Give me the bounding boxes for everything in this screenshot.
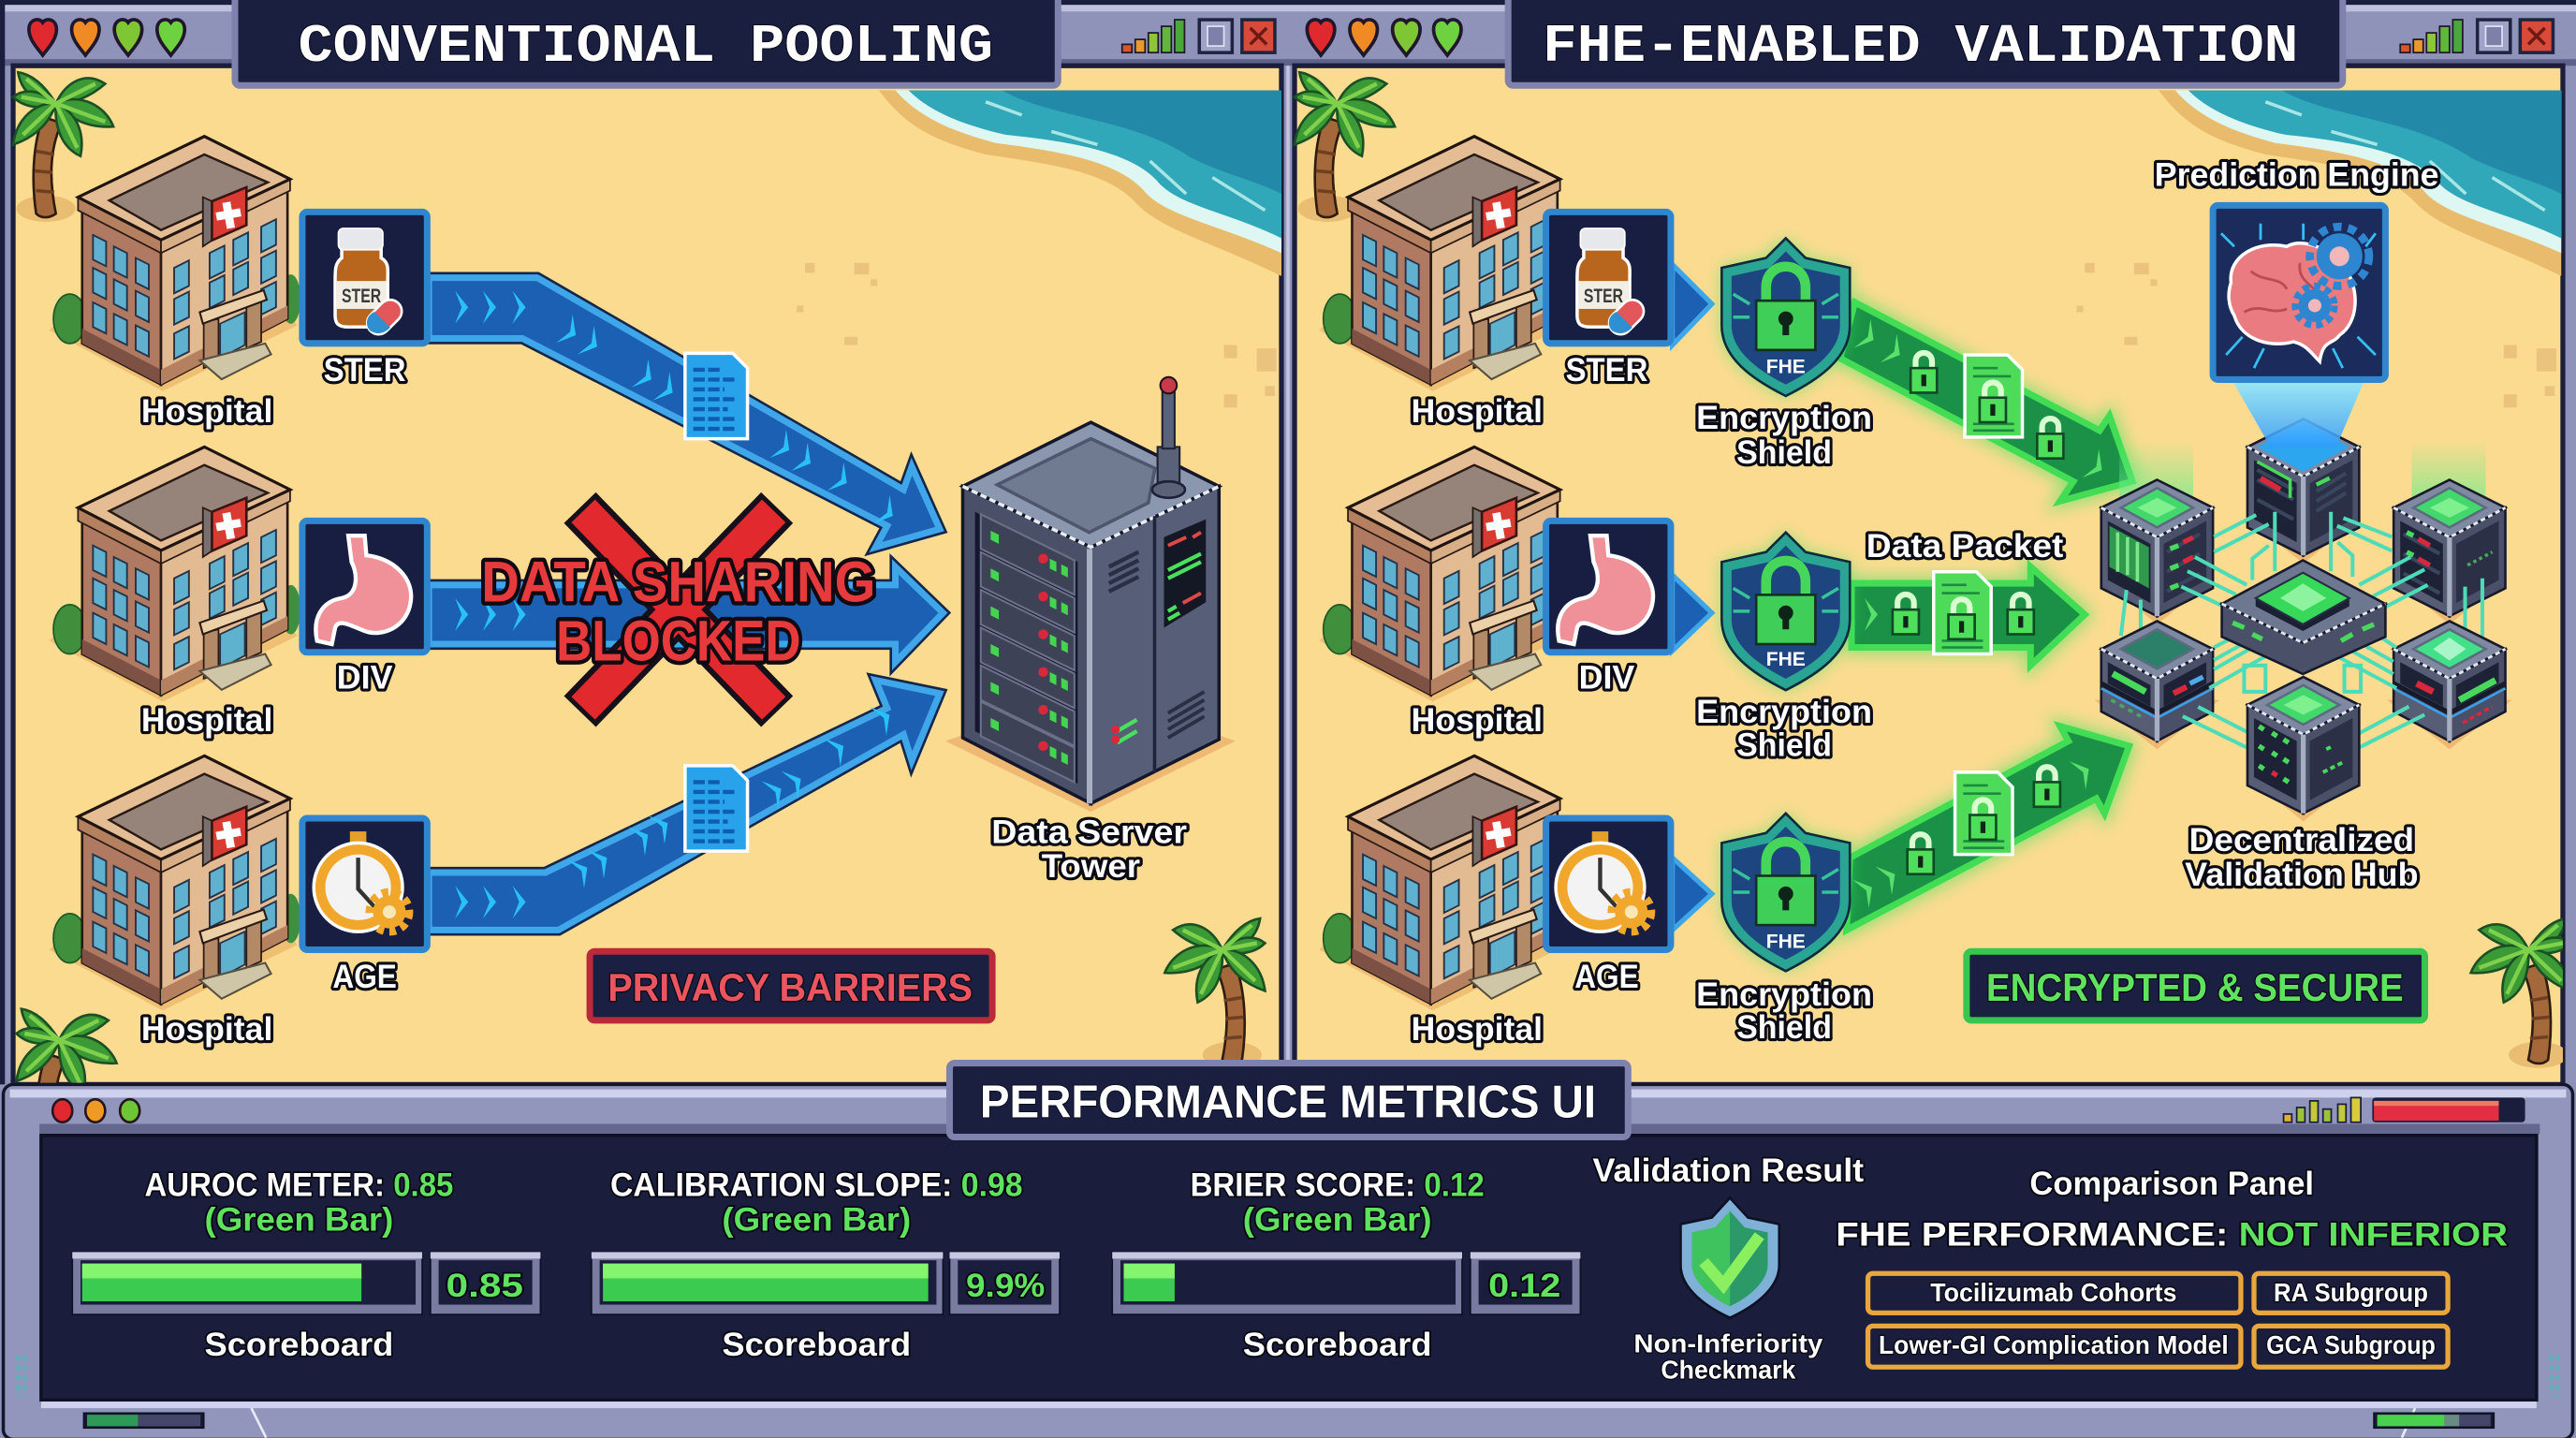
comparison panel (1836, 1166, 2508, 1367)
icon box: STER bottle (302, 212, 427, 344)
label: encryption shield top: Shield (1736, 434, 1832, 471)
metric: calibration slope: (Green Bar) (722, 1202, 911, 1239)
label: encryption shield middle: Encryption (1696, 694, 1872, 730)
metric: AUROC (72, 1167, 540, 1363)
title: FHE-enabled validation: FHE-ENABLED VALIDATION (1543, 17, 2298, 78)
metric: brier score (1112, 1167, 1580, 1363)
metric: AUROC: (Green Bar) (205, 1202, 393, 1239)
traffic lights (52, 1099, 139, 1123)
icon: encrypted packet top (1965, 355, 2023, 437)
chip: GCA subgroup: GCA Subgroup (2266, 1330, 2436, 1359)
metric: AUROC: Scoreboard (205, 1327, 393, 1363)
label: data server tower (991, 814, 1187, 885)
icon: encrypted packet bottom (1955, 772, 2012, 855)
palm tree bottom left (17, 1009, 117, 1158)
arrow: AGE to server (429, 681, 940, 930)
icon: encryption shield top (1721, 238, 1850, 396)
palm tree top left (1295, 72, 1395, 222)
label: hospital: Hospital (1412, 1011, 1543, 1048)
badge: encrypted and secure (1967, 951, 2425, 1020)
label: DIV: DIV (337, 659, 393, 696)
title: conventional pooling: CONVENTIONAL POOLING (299, 17, 993, 78)
label: data packet: Data Packet (1866, 528, 2064, 565)
hospital 1 (50, 137, 300, 391)
callout: data sharing blocked: BLOCKED (556, 609, 801, 674)
title: FHE-enabled validation (1508, 0, 2343, 85)
chip: lower-GI complication model: Lower-GI Complication Model (1879, 1330, 2229, 1359)
label: encryption shield bottom: Shield (1736, 1009, 1832, 1046)
decentralized validation hub (2095, 419, 2512, 822)
icon: encryption shield top: FHE (1766, 356, 1806, 377)
label: encryption shield middle: Shield (1736, 726, 1832, 763)
icon: data document top (685, 353, 748, 439)
title: performance metrics UI (949, 1064, 1628, 1137)
icon box: DIV stomach (302, 521, 427, 653)
footer status bar left (84, 1413, 204, 1428)
hub node lower right (2387, 621, 2512, 749)
status signal and battery (2284, 1097, 2525, 1123)
hub node top center (2247, 419, 2359, 564)
hub node center (2222, 560, 2385, 674)
comparison panel: FHE PERFORMANCE: NOT INFERIOR (1836, 1216, 2508, 1253)
icon box: AGE stopwatch (1546, 818, 1671, 949)
label: DIV: DIV (1579, 659, 1635, 696)
icon: encrypted packet middle (1934, 572, 1991, 654)
encrypted arrow middle (1852, 567, 2085, 666)
label: STER: STER (1566, 352, 1647, 389)
label: encryption shield bottom: Encryption (1696, 976, 1872, 1013)
panel: performance metrics (4, 1064, 2572, 1438)
callout: data sharing blocked (481, 550, 875, 674)
hub connection wires (2121, 512, 2482, 637)
callout: data sharing blocked: DATA SHARING (481, 550, 875, 614)
label: encryption shield middle (1696, 694, 1872, 763)
metric: calibration slope: CALIBRATION SLOPE: 0.98 (610, 1167, 1023, 1204)
label: encryption shield bottom (1696, 976, 1872, 1046)
footer status bar right (2374, 1413, 2494, 1428)
hospital 3 (50, 756, 300, 1010)
label: prediction engine: Prediction Engine (2155, 156, 2438, 193)
hospital 1 (1319, 137, 1571, 391)
red X block mark (580, 507, 777, 712)
icon: encryption shield middle: FHE (1766, 649, 1806, 670)
beach background right (1295, 66, 2563, 1084)
arrow: STER to server (429, 278, 940, 547)
beam from engine to hub (2232, 381, 2364, 447)
label: encryption shield top: Encryption (1696, 400, 1872, 436)
icon: encryption shield middle (1721, 533, 1850, 690)
metric: calibration slope (592, 1167, 1060, 1363)
arrow: DIV to server (429, 567, 943, 662)
validation result: Non-Inferiority (1633, 1328, 1823, 1357)
validation result (1593, 1152, 1864, 1385)
palm tree bottom right (1164, 918, 1265, 1068)
badge: encrypted and secure: ENCRYPTED & SECURE (1986, 965, 2404, 1009)
beach background left (13, 66, 1281, 1084)
label: AGE: AGE (1574, 959, 1639, 995)
label: hospital: Hospital (141, 1011, 272, 1048)
hospital 2 (50, 447, 300, 701)
hub node bottom center (2247, 677, 2359, 822)
chip: tocilizumab cohorts (1868, 1273, 2241, 1313)
chip: tocilizumab cohorts: Tocilizumab Cohorts (1930, 1278, 2177, 1307)
label: hospital: Hospital (1412, 702, 1543, 739)
panel: FHE-enabled validation (1295, 66, 2571, 1084)
metric: AUROC: 0.85 (446, 1268, 523, 1304)
metric: calibration slope: 9.9% (966, 1268, 1045, 1304)
icon: data document bottom (685, 766, 748, 851)
title bar: left window controls (29, 20, 1275, 55)
metrics window frame (4, 1084, 2572, 1438)
metric: brier score: 0.12 (1488, 1268, 1560, 1304)
icon box: STER bottle: STER (1584, 286, 1623, 307)
title: conventional pooling (235, 0, 1058, 85)
label: data server tower: Data Server (991, 814, 1187, 850)
label: decentralized validation hub: Decentralized (2189, 822, 2414, 858)
icon: encryption shield bottom: FHE (1766, 932, 1806, 953)
hub node lower left (2095, 621, 2219, 749)
data server tower (945, 377, 1236, 812)
label: STER: STER (324, 352, 406, 389)
panel: conventional pooling (13, 66, 1281, 1158)
badge: privacy barriers: PRIVACY BARRIERS (607, 965, 973, 1009)
comparison panel: Comparison Panel (2029, 1166, 2314, 1202)
validation result: Validation Result (1593, 1152, 1864, 1189)
hub center wires (2183, 627, 2424, 747)
icon: prediction engine brain (2213, 205, 2385, 379)
title: performance metrics UI: PERFORMANCE METRICS UI (980, 1077, 1596, 1127)
metric: brier score: Scoreboard (1243, 1327, 1432, 1363)
label: hospital: Hospital (1412, 393, 1543, 430)
label: decentralized validation hub (2185, 822, 2419, 893)
icon box: DIV stomach (1546, 521, 1671, 653)
chip: lower-GI complication model (1868, 1326, 2241, 1367)
badge: privacy barriers (590, 951, 992, 1020)
label: encryption shield top (1696, 400, 1872, 471)
encrypted arrow bottom (1847, 726, 2130, 930)
metric: brier score: BRIER SCORE: 0.12 (1191, 1167, 1485, 1204)
hospital 3 (1319, 756, 1571, 1010)
label: decentralized validation hub: Validation Hub (2185, 857, 2419, 893)
metric: AUROC: AUROC METER: 0.85 (144, 1167, 453, 1204)
icon box: STER bottle: STER (342, 286, 381, 307)
chip: RA subgroup (2254, 1273, 2448, 1313)
hub node top right (2393, 479, 2506, 624)
palm tree bottom right (2471, 918, 2571, 1068)
metric: calibration slope: Scoreboard (722, 1327, 911, 1363)
chip: RA subgroup: RA Subgroup (2274, 1278, 2428, 1307)
label: hospital: Hospital (141, 702, 272, 739)
encrypted arrow top (1840, 302, 2132, 501)
chip: GCA subgroup (2254, 1326, 2448, 1367)
metric: brier score: (Green Bar) (1243, 1202, 1432, 1239)
arrow stubs: icon to shield (1673, 265, 1712, 930)
label: data server tower: Tower (1042, 848, 1140, 885)
hospital 2 (1319, 447, 1571, 701)
label: AGE: AGE (332, 959, 397, 995)
green glow above nodes (2119, 440, 2485, 498)
icon box: AGE stopwatch (302, 818, 427, 949)
title bar: right window controls (1307, 20, 2553, 55)
hub node top left (2101, 479, 2213, 624)
palm tree top left (13, 72, 113, 222)
label: hospital: Hospital (141, 393, 272, 430)
validation result: Checkmark (1661, 1356, 1796, 1385)
icon box: STER bottle (1546, 212, 1671, 344)
icon: encryption shield bottom (1721, 814, 1850, 971)
